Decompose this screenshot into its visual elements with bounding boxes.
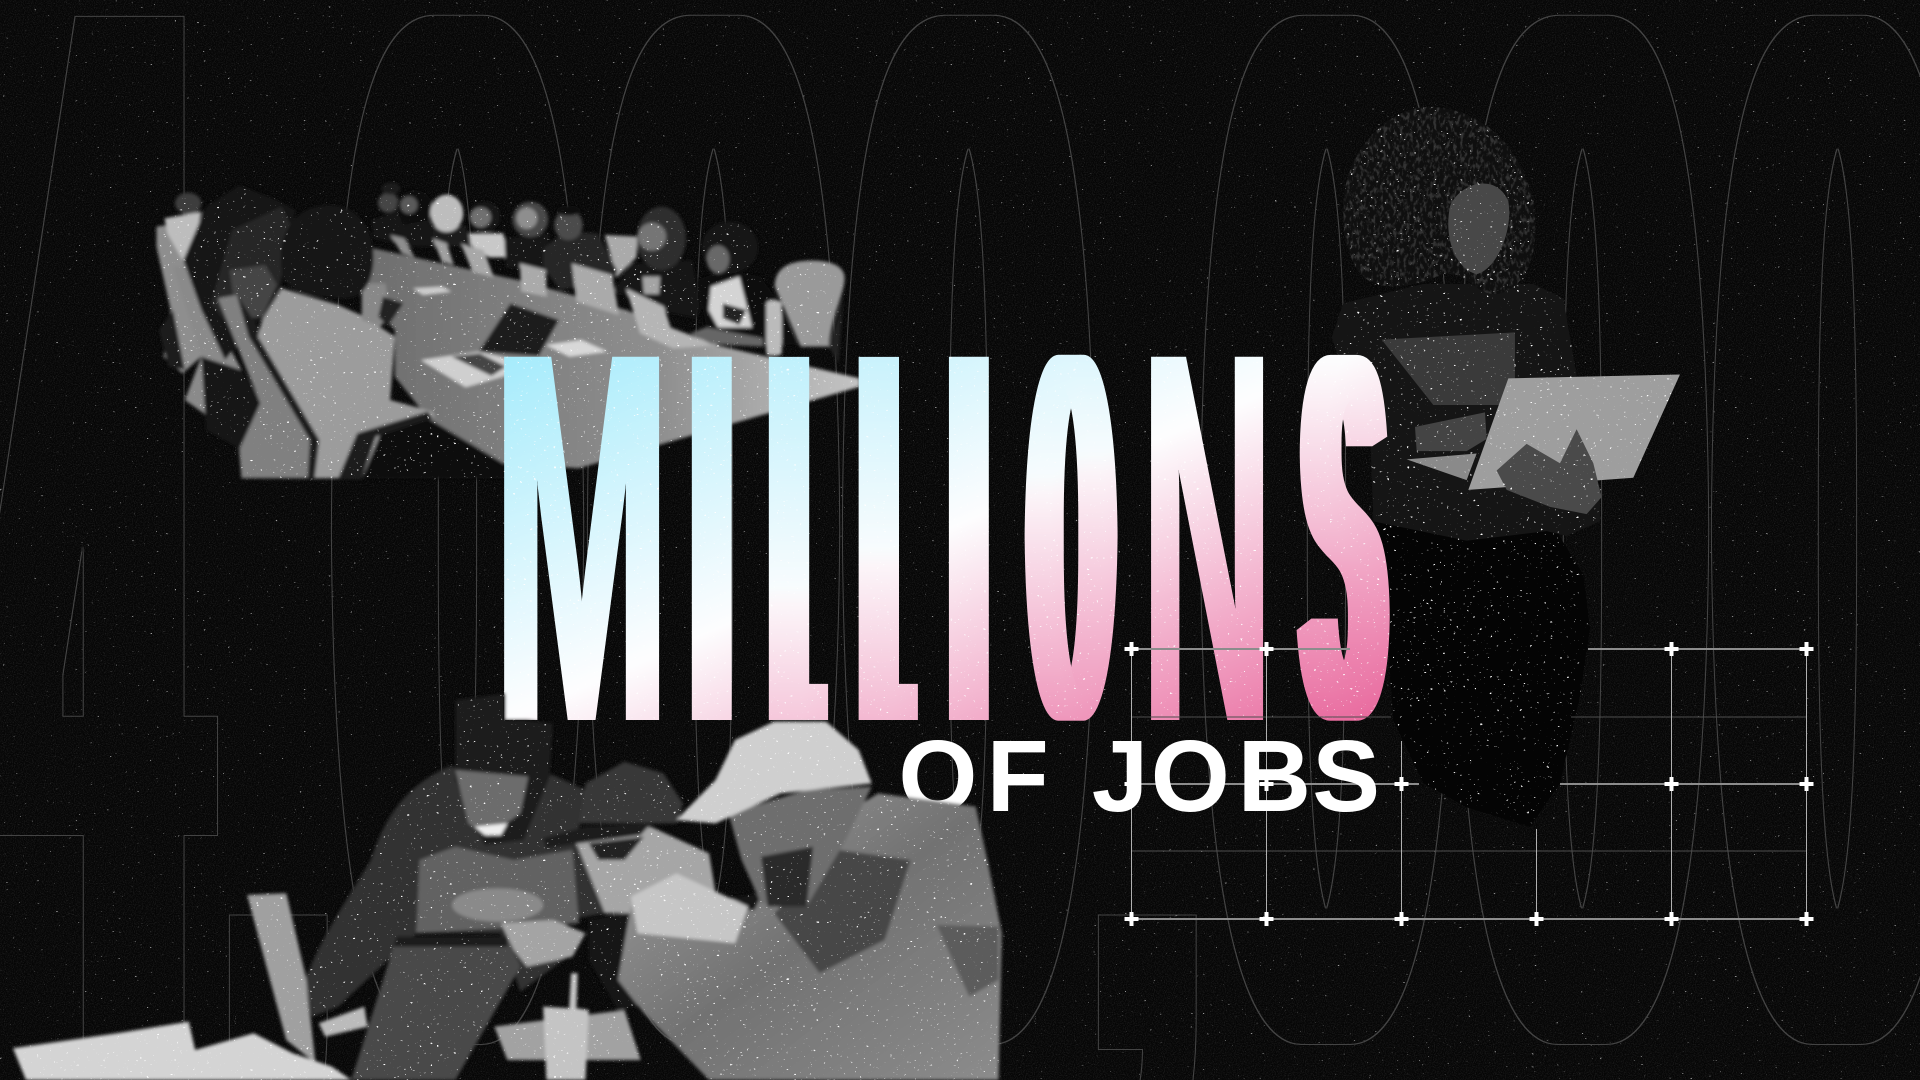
papers on the desk: [13, 1022, 351, 1080]
conference table: [367, 248, 860, 468]
laptop in foreground: [351, 937, 520, 1080]
letter M: M: [493, 245, 670, 836]
woman seen from behind in the foreground: [258, 205, 435, 478]
man in baseball cap: [543, 762, 761, 1010]
subtitle: OF JOBS: OF JOBS: [898, 719, 1380, 833]
chairs at left: [157, 225, 263, 450]
laptops and papers on the table: [390, 235, 782, 387]
nearest chair: [218, 295, 326, 478]
letter N: N: [1141, 245, 1273, 836]
drinking glass: [543, 973, 589, 1080]
laptop behind: [247, 893, 315, 1063]
title: MILLIONS: [493, 223, 1381, 858]
grid with plus markers: [1124, 642, 1814, 926]
letter L: L: [872, 223, 903, 858]
arm and hand near the laptop: [319, 1007, 641, 1060]
photo: woman using a tablet: [1332, 107, 1680, 827]
tablet: [1468, 375, 1680, 490]
dark area under table: [362, 418, 506, 478]
hair: [1343, 107, 1536, 294]
seated people on the left: [165, 185, 296, 360]
letter L: L: [782, 223, 813, 858]
back row of people: [371, 182, 845, 363]
face: [1448, 184, 1509, 274]
hands: [1415, 412, 1487, 451]
photo: team around a meeting table: [157, 182, 860, 478]
letter O: O: [1033, 224, 1109, 857]
man in flat cap and hood: [618, 722, 1002, 1080]
light reflection on sweater: [1382, 332, 1515, 405]
grid lines: [1132, 649, 1806, 919]
letter S: S: [1306, 243, 1381, 837]
photo: three men laughing at a laptop: [13, 693, 1002, 1080]
black sweater: [1332, 284, 1600, 541]
plus markers: [1124, 642, 1814, 926]
black trousers: [1373, 507, 1590, 827]
letter I: I: [930, 245, 1007, 836]
letter I: I: [673, 245, 750, 836]
man in dark sweatshirt: [306, 693, 605, 1017]
